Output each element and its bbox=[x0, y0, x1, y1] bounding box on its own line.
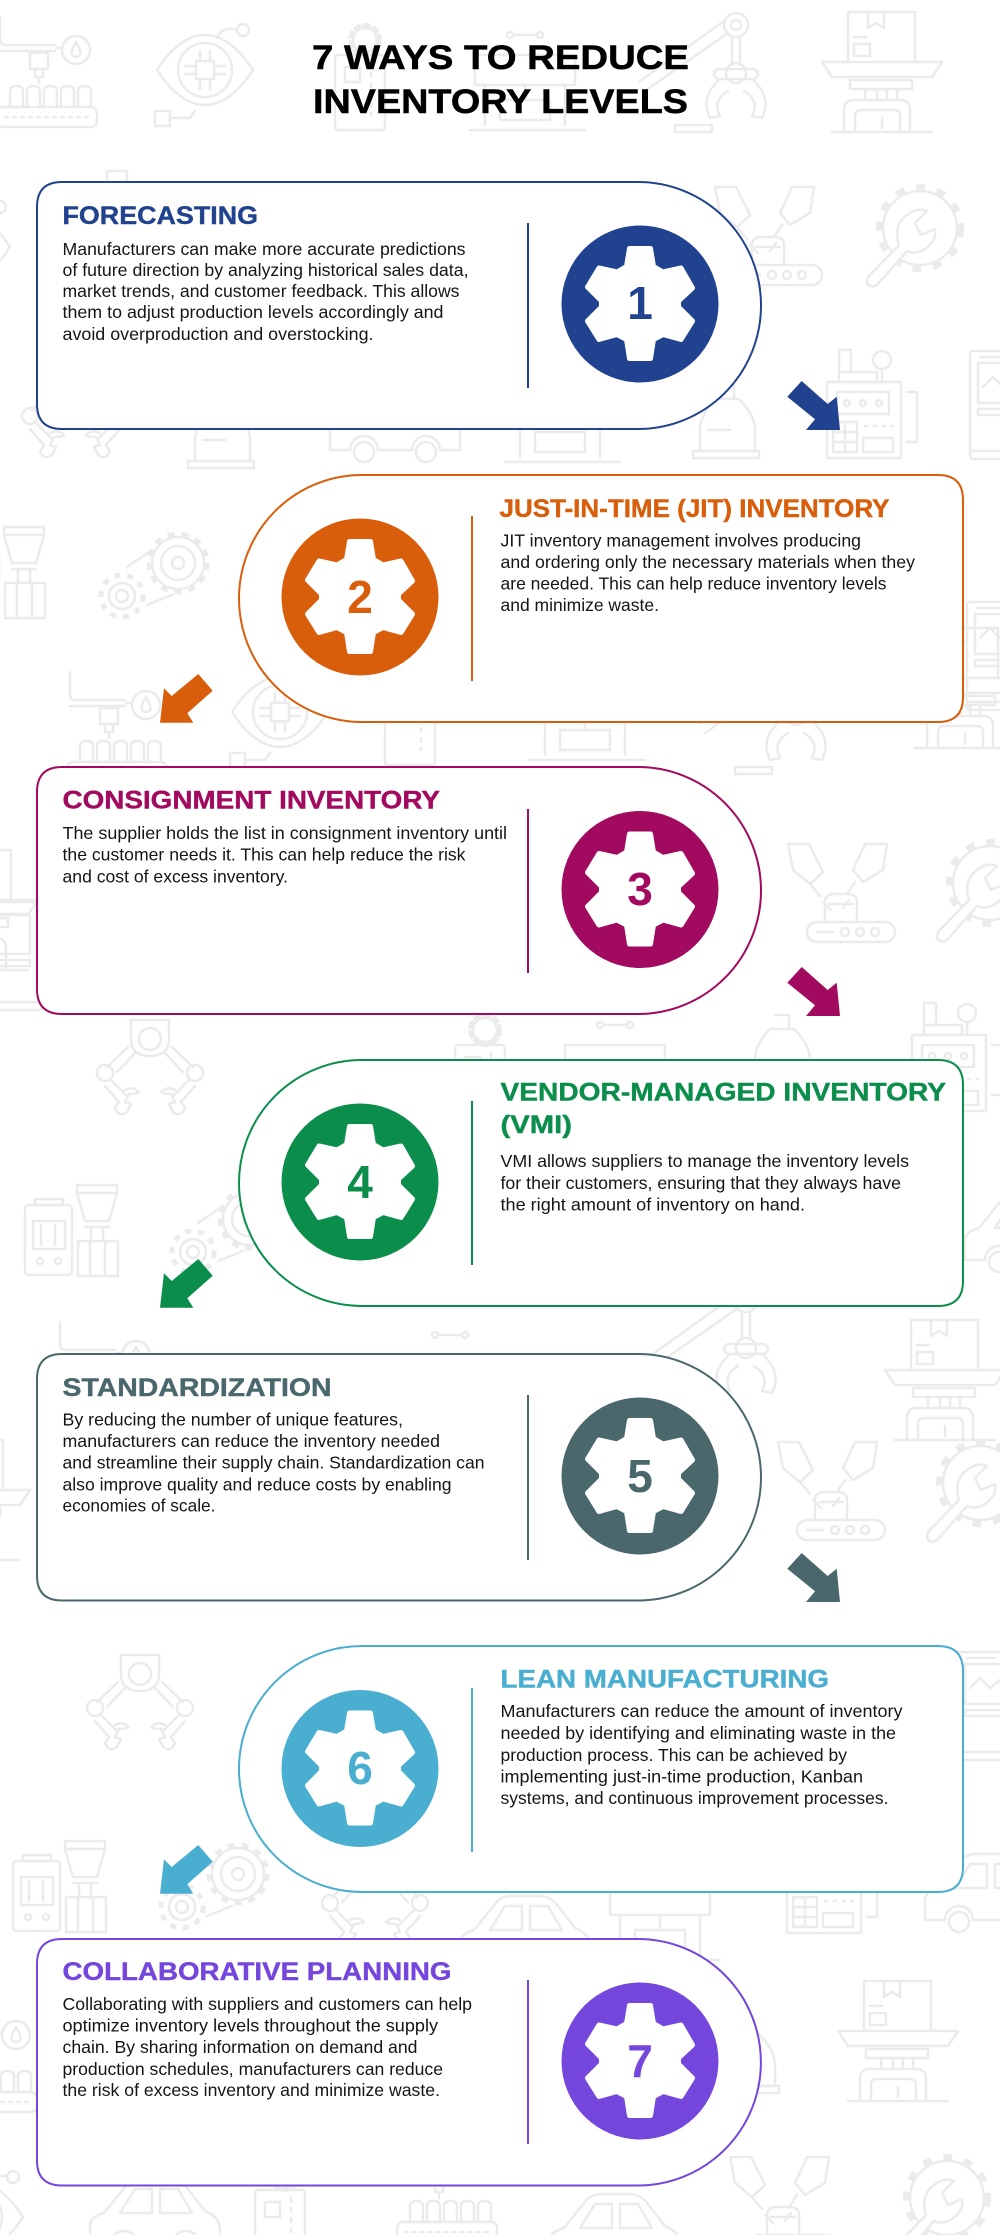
body text: the customer needs it. This can help reduce the risk bbox=[62, 844, 466, 864]
heading: (VMI) bbox=[500, 1111, 572, 1139]
body text bbox=[62, 1410, 484, 1516]
body text: for their customers, ensuring that they always have bbox=[500, 1173, 901, 1193]
card outline bbox=[37, 1939, 761, 2186]
body text: the risk of excess inventory and minimize waste. bbox=[62, 2080, 440, 2100]
body text: production schedules, manufacturers can reduce bbox=[62, 2059, 443, 2079]
body text: of future direction by analyzing historical sales data, bbox=[62, 260, 468, 280]
body text: VMI allows suppliers to manage the inventory levels bbox=[500, 1151, 909, 1171]
body text: the right amount of inventory on hand. bbox=[500, 1194, 805, 1214]
icon: numbered gear 4 bbox=[282, 1104, 438, 1260]
card outline bbox=[239, 1646, 963, 1892]
body text: chain. By sharing information on demand and bbox=[62, 2037, 418, 2057]
icon: numbered gear 1: 1 bbox=[627, 277, 653, 329]
card outline bbox=[37, 767, 761, 1014]
panel: just-in-time inventory bbox=[239, 475, 963, 722]
panel: collaborative planning bbox=[37, 1939, 761, 2186]
arrow: forecasting to JIT bbox=[787, 381, 840, 430]
icon: numbered gear 6: 6 bbox=[347, 1742, 373, 1794]
arrow: standardization to lean bbox=[787, 1553, 840, 1602]
body text: The supplier holds the list in consignment inventory until bbox=[62, 823, 507, 843]
body text: optimize inventory levels throughout the supply bbox=[62, 2016, 438, 2036]
body text: economies of scale. bbox=[62, 1496, 216, 1516]
body text bbox=[62, 239, 468, 344]
icon: numbered gear 7 bbox=[562, 1982, 718, 2140]
panel: forecasting bbox=[37, 182, 761, 429]
body text: and ordering only the necessary materials when they bbox=[500, 552, 915, 572]
icon: numbered gear 1 bbox=[562, 226, 718, 382]
body text: them to adjust production levels accordingly and bbox=[62, 302, 444, 322]
body text: implementing just-in-time production, Kanban bbox=[500, 1766, 863, 1786]
heading: LEAN MANUFACTURING bbox=[500, 1666, 829, 1694]
card outline bbox=[37, 182, 761, 429]
body text: and cost of excess inventory. bbox=[62, 866, 288, 886]
icon: numbered gear 7: 7 bbox=[627, 2035, 653, 2087]
body text: are needed. This can help reduce inventory levels bbox=[500, 574, 887, 594]
panel: lean manufacturing bbox=[239, 1646, 963, 1892]
body text: manufacturers can reduce the inventory needed bbox=[62, 1431, 440, 1451]
body text: and minimize waste. bbox=[500, 595, 659, 615]
body text: and streamline their supply chain. Standardization can bbox=[62, 1452, 484, 1472]
heading: COLLABORATIVE PLANNING bbox=[62, 1958, 452, 1986]
heading: FORECASTING bbox=[62, 202, 258, 230]
body text: needed by identifying and eliminating waste in the bbox=[500, 1723, 896, 1743]
body text bbox=[500, 530, 915, 615]
body text: market trends, and customer feedback. This allows bbox=[62, 281, 460, 301]
body text: avoid overproduction and overstocking. bbox=[62, 324, 374, 344]
body text bbox=[62, 823, 507, 886]
body text: also improve quality and reduce costs by enabling bbox=[62, 1474, 452, 1494]
divider bbox=[471, 1688, 473, 1852]
heading: STANDARDIZATION bbox=[62, 1374, 332, 1402]
heading: JUST-IN-TIME (JIT) INVENTORY bbox=[500, 495, 890, 523]
icon: numbered gear 6 bbox=[282, 1690, 438, 1847]
divider bbox=[527, 809, 529, 973]
arrow: lean to collaborative bbox=[160, 1845, 213, 1894]
panel: vendor-managed inventory bbox=[239, 1060, 963, 1306]
divider bbox=[471, 516, 473, 681]
divider bbox=[471, 1101, 473, 1265]
icon: numbered gear 2: 2 bbox=[347, 571, 373, 623]
body text: production process. This can be achieved by bbox=[500, 1745, 847, 1765]
card outline bbox=[239, 475, 963, 722]
arrow: VMI to standardization bbox=[160, 1259, 213, 1308]
icon: numbered gear 5 bbox=[562, 1398, 718, 1554]
body text: Manufacturers can make more accurate predictions bbox=[62, 239, 466, 259]
heading bbox=[500, 1078, 946, 1139]
panel: consignment inventory bbox=[37, 767, 761, 1014]
body text: Manufacturers can reduce the amount of inventory bbox=[500, 1701, 903, 1721]
body text bbox=[500, 1701, 903, 1808]
body text: systems, and continuous improvement processes. bbox=[500, 1788, 888, 1808]
body text: JIT inventory management involves producing bbox=[500, 530, 861, 550]
card outline bbox=[239, 1060, 963, 1306]
body text bbox=[500, 1151, 909, 1214]
icon: numbered gear 3 bbox=[562, 811, 718, 968]
icon: numbered gear 3: 3 bbox=[627, 863, 653, 915]
title: INVENTORY LEVELS bbox=[313, 83, 688, 121]
arrow: consignment to VMI bbox=[787, 967, 840, 1016]
body text: Collaborating with suppliers and customers can help bbox=[62, 1994, 472, 2014]
title bbox=[312, 39, 689, 121]
heading: CONSIGNMENT INVENTORY bbox=[62, 786, 440, 814]
card outline bbox=[37, 1354, 761, 1600]
icon: numbered gear 2 bbox=[282, 518, 438, 676]
body text: By reducing the number of unique features, bbox=[62, 1410, 403, 1430]
heading: VENDOR-MANAGED INVENTORY bbox=[500, 1078, 946, 1106]
icon: numbered gear 4: 4 bbox=[347, 1156, 373, 1208]
divider bbox=[527, 1980, 529, 2144]
body text bbox=[62, 1994, 472, 2100]
divider bbox=[527, 1395, 529, 1560]
arrow: JIT to consignment bbox=[160, 674, 213, 723]
title: 7 WAYS TO REDUCE bbox=[312, 39, 689, 77]
icon: numbered gear 5: 5 bbox=[627, 1450, 653, 1502]
divider bbox=[527, 223, 529, 388]
panel: standardization bbox=[37, 1354, 761, 1600]
